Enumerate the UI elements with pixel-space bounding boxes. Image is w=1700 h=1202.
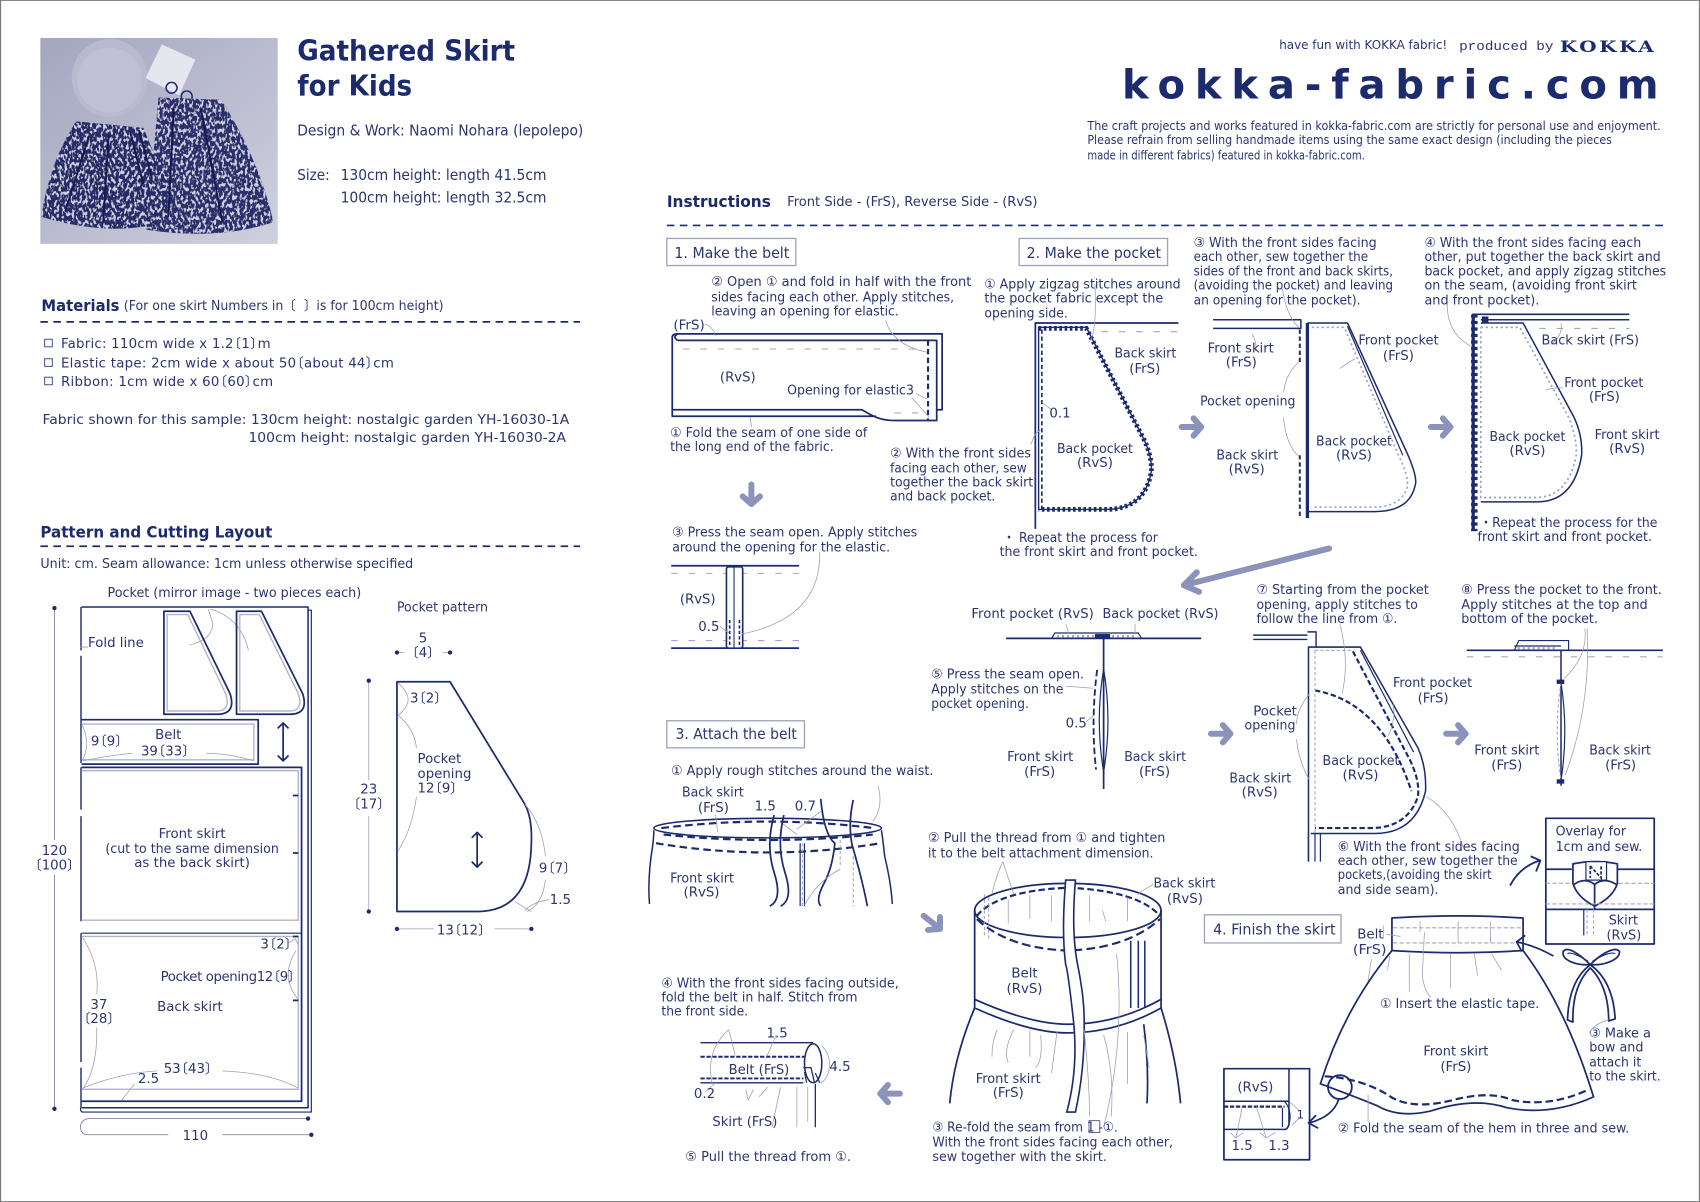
cutting layout diagram: Back skirt: [157, 1000, 223, 1015]
site header: made in different fabrics) featured in kokka-fabric.com.: [1087, 148, 1365, 162]
cutting layout diagram: 〔100〕: [28, 858, 81, 873]
pocket pattern diagram: 5: [419, 632, 427, 647]
cutting layout diagram: 9〔9〕: [91, 735, 129, 750]
pocket pattern diagram: 〔17〕: [347, 798, 391, 813]
designer and size text: Design & Work: Naomi Nohara (lepolepo): [297, 121, 583, 139]
section 3 steps 2-3: belt attached: (RvS): [1006, 982, 1043, 997]
section 4: finish the skirt: bow and: [1589, 1040, 1643, 1055]
section 3 steps 4-5: folded belt: Skirt (FrS): [712, 1115, 777, 1130]
section 2 step 3: (FrS): [1383, 349, 1414, 364]
section 2 step 4: (RvS): [1609, 442, 1645, 457]
section 2 step 1-2: zigzag pocket: together the back skirt: [890, 476, 1033, 491]
pattern heading: Unit: cm. Seam allowance: 1cm unless otherwise specified: [40, 557, 413, 572]
inset: overlay detail: (RvS): [1607, 929, 1641, 944]
section 2 step 4: (FrS): [1589, 390, 1620, 405]
section 3 steps 2-3: belt attached: sew together with the skirt.: [932, 1150, 1107, 1165]
section 2 step 8: (FrS): [1491, 759, 1522, 774]
section 3 steps 2-3: belt attached: Front skirt: [976, 1072, 1041, 1087]
designer and size text: 130cm height: length 41.5cm: [341, 166, 547, 184]
section 1: make the belt: (FrS): [673, 318, 705, 333]
section 2 step 8: Front skirt: [1474, 743, 1539, 758]
photo of skirts, beret and glasses: [40, 38, 278, 244]
section 3 steps 4-5: folded belt: 1.5: [767, 1026, 788, 1041]
cutting layout diagram: 〔28〕: [77, 1012, 121, 1027]
section 2 step 3: sides of the front and back skirts,: [1194, 264, 1393, 279]
materials section: Ribbon: 1cm wide x 60〔60〕cm: [61, 375, 273, 390]
section 2 step 4: Back pocket: [1489, 430, 1565, 445]
section 3 step 1: rough stitches: [649, 721, 940, 930]
title: for Kids: [297, 69, 412, 102]
section 3 steps 4-5: folded belt: [661, 976, 899, 1165]
instructions heading: [667, 192, 1666, 225]
section 3 step 1: rough stitches: 1.5: [755, 800, 776, 815]
section 2 step 8: ⑧ Press the pocket to the front.: [1461, 583, 1662, 598]
pocket pattern diagram: 12〔9〕: [418, 781, 464, 796]
section 2 steps 6-7: pockets,(avoiding the skirt: [1338, 868, 1492, 883]
section 2 step 3: [1194, 236, 1450, 518]
cutting layout diagram: 110: [183, 1129, 208, 1144]
inset: overlay detail: Overlay for: [1556, 825, 1627, 840]
section 3 steps 4-5: folded belt: Belt (FrS): [729, 1063, 789, 1078]
section 2 steps 6-7: opening, apply stitches to: [1256, 598, 1418, 613]
section 3 steps 2-3: belt attached: ③ Re-fold the seam from 1 -①.: [932, 1121, 1118, 1136]
section 4: finish the skirt: [1204, 915, 1661, 1137]
site header: KOKKA: [1560, 37, 1656, 56]
section 4: finish the skirt: (FrS): [1353, 943, 1387, 958]
site header: [1086, 37, 1661, 162]
section 2 steps 6-7: Pocket: [1253, 704, 1297, 719]
section 2 step 1-2: zigzag pocket: ・ Repeat the process for: [1003, 531, 1158, 546]
section 3 steps 4-5: folded belt: 4.5: [829, 1060, 851, 1075]
pocket pattern diagram: Pocket: [418, 752, 461, 767]
cutting layout diagram: Belt: [155, 728, 181, 743]
section 2 step 4: [1424, 236, 1666, 545]
section 2 step 8: bottom of the pocket.: [1461, 612, 1598, 627]
designer and size text: 100cm height: length 32.5cm: [341, 189, 547, 207]
section 2 step 3: Front skirt: [1208, 341, 1274, 356]
section 2 step 4: front skirt and front pocket.: [1478, 530, 1652, 545]
section 2 steps 6-7: (RvS): [1342, 768, 1379, 783]
title: [297, 35, 515, 102]
site header: have fun with KOKKA fabric!: [1279, 37, 1447, 52]
section 2 step 5: Front skirt: [1007, 750, 1073, 765]
section 2 step 5: 0.5: [1066, 716, 1087, 731]
section 1: make the belt: sides facing each other. Apply stitches,: [711, 290, 954, 305]
pocket pattern diagram: [347, 600, 577, 938]
cutting layout diagram: 39〔33〕: [141, 744, 196, 759]
cutting layout diagram: 120: [42, 844, 67, 859]
section 3 step 1: rough stitches: 3. Attach the belt: [675, 726, 797, 743]
section 2 step 8: Back skirt: [1589, 743, 1651, 758]
section 2 step 3: (RvS): [1336, 449, 1372, 464]
section 2 step 4: on the seam, (avoiding front skirt: [1424, 278, 1637, 293]
section 2 steps 6-7: each other, sew together the: [1338, 854, 1518, 869]
inset: hem fold detail: 1.3: [1268, 1139, 1290, 1154]
section 2 step 8: (FrS): [1605, 759, 1636, 774]
section 3 step 1: rough stitches: (FrS): [698, 801, 729, 816]
inset: hem fold detail: 1.5: [1232, 1139, 1253, 1154]
section 3 steps 2-3: belt attached: ② Pull the thread from ① and tighten: [928, 831, 1165, 846]
cutting layout diagram: 37: [90, 998, 107, 1013]
section 2 step 1-2: zigzag pocket: 0.1: [1049, 406, 1071, 421]
section 4: finish the skirt: Front skirt: [1423, 1045, 1488, 1060]
section 4: finish the skirt: (FrS): [1440, 1060, 1471, 1075]
site header: Please refrain from selling handmade items using the same exact design (including the pieces: [1087, 133, 1612, 147]
section 2 step 5: Back skirt: [1124, 750, 1186, 765]
section 2 step 3: Back skirt: [1216, 449, 1278, 464]
section 2 step 5: [931, 607, 1230, 789]
section 2 step 1-2: zigzag pocket: [890, 238, 1201, 560]
section 1: make the belt: leaving an opening for elastic.: [711, 304, 899, 319]
designer and size text: Size:: [297, 166, 330, 184]
section 2 steps 6-7: (RvS): [1242, 786, 1278, 801]
cutting layout diagram: as the back skirt): [134, 856, 250, 871]
section 2 step 1-2: zigzag pocket: (FrS): [1129, 362, 1160, 377]
section 2 step 8: Apply stitches at the top and: [1461, 598, 1648, 613]
section 3 step 1: rough stitches: ① Apply rough stitches around the waist.: [671, 764, 933, 779]
section 2 step 4: and front pocket).: [1424, 294, 1539, 309]
section 2 steps 6-7: opening: [1245, 718, 1295, 733]
cutting layout diagram: (cut to the same dimension: [105, 842, 279, 857]
section 2 step 4: ④ With the front sides facing each: [1424, 236, 1641, 251]
cutting layout diagram: 3〔2〕: [260, 937, 298, 952]
cutting layout diagram: 2.5: [138, 1072, 159, 1087]
instructions heading: Front Side - (FrS), Reverse Side - (RvS): [787, 195, 1038, 210]
inset: hem fold detail: [1224, 1069, 1310, 1160]
site header: The craft projects and works featured in kokka-fabric.com are strictly for personal use and enjoyment.: [1086, 119, 1661, 133]
section 2 step 4: Front pocket: [1564, 376, 1643, 391]
inset: overlay detail: 1cm and sew.: [1556, 840, 1642, 855]
cutting layout diagram: Fold line: [88, 636, 144, 651]
instructions heading: Instructions: [667, 192, 771, 211]
section 3 steps 2-3: belt attached: With the front sides facing each other,: [932, 1136, 1173, 1151]
materials section: (For one skirt Numbers in〔 〕is for 100cm height): [124, 299, 444, 314]
pattern heading: [40, 523, 580, 572]
section 3 steps 2-3: belt attached: it to the belt attachment dimension.: [928, 846, 1153, 861]
section 1: make the belt: the long end of the fabric.: [670, 440, 834, 455]
section 2 steps 6-7: (FrS): [1418, 691, 1449, 706]
pattern heading: Pattern and Cutting Layout: [40, 523, 273, 542]
section 2 step 1-2: zigzag pocket: and back pocket.: [890, 490, 995, 505]
materials section: Elastic tape: 2cm wide x about 50〔about 44〕cm: [61, 356, 394, 371]
section 2 step 1-2: zigzag pocket: facing each other, sew: [890, 462, 1027, 477]
section 2 steps 6-7: and side seam).: [1338, 883, 1439, 898]
section 2 step 3: (FrS): [1226, 355, 1257, 370]
section 3 steps 4-5: folded belt: 0.2: [694, 1087, 715, 1102]
section 4: finish the skirt: attach it: [1589, 1056, 1641, 1071]
materials section: 100cm height: nostalgic garden YH-16030-2A: [248, 431, 566, 446]
section 3 steps 2-3: belt attached: Belt: [1011, 967, 1038, 982]
section 2 step 3: each other, sew together the: [1194, 250, 1368, 265]
section 3 steps 2-3: belt attached: Back skirt: [1153, 877, 1215, 892]
section 2 step 1-2: zigzag pocket: Back skirt: [1114, 347, 1176, 362]
pocket pattern diagram: 23: [360, 782, 377, 797]
materials section: Fabric shown for this sample: 130cm height: nostalgic garden YH-16030-1A: [43, 413, 569, 428]
section 4: finish the skirt: to the skirt.: [1589, 1070, 1661, 1085]
cutting layout diagram: Pocket opening12〔9〕: [161, 970, 301, 985]
section 3 step 1: rough stitches: Back skirt: [682, 786, 744, 801]
pocket pattern diagram: 13〔12〕: [437, 923, 491, 938]
materials section: Materials: [41, 296, 119, 315]
cutting layout diagram: [28, 586, 361, 1144]
section 2 step 1-2: zigzag pocket: (RvS): [1077, 456, 1113, 471]
section 3 steps 4-5: folded belt: ⑤ Pull the thread from ①.: [685, 1150, 851, 1165]
section 2 step 3: ③ With the front sides facing: [1194, 236, 1377, 251]
section 1: make the belt: (RvS): [680, 593, 716, 608]
pocket pattern diagram: Pocket pattern: [397, 600, 488, 615]
section 1: make the belt: ② Open ① and fold in half with the front: [711, 275, 971, 290]
section 2 steps 6-7: Back skirt: [1229, 772, 1291, 787]
section 2 step 3: an opening for the pocket).: [1194, 294, 1360, 309]
section 4: finish the skirt: ① Insert the elastic tape.: [1380, 997, 1539, 1012]
pocket pattern diagram: 1.5: [550, 893, 571, 908]
section 2 step 3: Pocket opening: [1200, 394, 1295, 409]
section 2 step 1-2: zigzag pocket: the pocket fabric except the: [984, 291, 1163, 306]
section 2 step 1-2: zigzag pocket: ① Apply zigzag stitches around: [984, 277, 1181, 292]
section 3 steps 4-5: folded belt: the front side.: [661, 1005, 748, 1020]
section 1: make the belt: 0.5: [698, 620, 719, 635]
pocket pattern diagram: opening: [418, 767, 471, 782]
section 2 step 1-2: zigzag pocket: Back pocket: [1057, 442, 1133, 457]
cutting layout diagram: 53〔43〕: [164, 1062, 218, 1077]
section 2 step 8: [1461, 583, 1663, 786]
section 4: finish the skirt: 4. Finish the skirt: [1213, 921, 1336, 938]
section 2 step 3: (avoiding the pocket) and leaving: [1194, 278, 1393, 293]
section 3 steps 2-3: belt attached: (FrS): [993, 1086, 1024, 1101]
cutting layout diagram: Pocket (mirror image - two pieces each): [108, 586, 361, 601]
section 2 step 5: ⑤ Press the seam open.: [931, 667, 1084, 682]
section 1: make the belt: [667, 238, 971, 648]
section 2 step 4: (RvS): [1509, 444, 1545, 459]
section 2 step 4: Back skirt (FrS): [1542, 334, 1639, 349]
section 2 step 4: back pocket, and apply zigzag stitches: [1424, 264, 1666, 279]
section 2 step 3: Back pocket: [1316, 434, 1392, 449]
pocket pattern diagram: 〔4〕: [405, 646, 441, 661]
section 1: make the belt: 1. Make the belt: [674, 245, 790, 262]
pocket pattern diagram: 3〔2〕: [410, 691, 448, 706]
section 2 step 1-2: zigzag pocket: the front skirt and front pocket.: [1000, 545, 1198, 560]
section 2 step 4: other, put together the back skirt and: [1424, 250, 1661, 265]
materials section: Fabric: 110cm wide x 1.2〔1〕m: [61, 337, 271, 352]
section 2 step 5: Apply stitches on the: [931, 683, 1064, 698]
title: Gathered Skirt: [297, 35, 515, 68]
section 1: make the belt: around the opening for the elastic.: [672, 541, 890, 556]
section 2 step 5: Back pocket (RvS): [1103, 607, 1219, 622]
designer and size text: [297, 121, 583, 207]
section 2 step 3: Front pocket: [1358, 334, 1439, 349]
section 4: finish the skirt: ③ Make a: [1589, 1026, 1651, 1041]
arrow: large diagonal to step 5: [1184, 548, 1329, 592]
section 2 steps 6-7: Front pocket: [1393, 676, 1472, 691]
section 1: make the belt: (RvS): [720, 371, 756, 386]
section 2 step 5: Front pocket (RvS): [971, 607, 1094, 622]
section 2 step 4: ・Repeat the process for the: [1480, 516, 1657, 531]
section 2 steps 6-7: ⑦ Starting from the pocket: [1256, 583, 1429, 598]
section 3 steps 4-5: folded belt: fold the belt in half. Stitch from: [661, 990, 858, 1005]
cutting layout diagram: Front skirt: [159, 827, 226, 842]
section 2 step 5: (FrS): [1024, 765, 1055, 780]
section 1: make the belt: Opening for elastic3: [787, 384, 914, 399]
section 3 step 1: rough stitches: Front skirt: [670, 871, 734, 886]
section 1: make the belt: ① Fold the seam of one side of: [670, 426, 868, 441]
section 2 step 5: (FrS): [1139, 765, 1170, 780]
section 2 step 3: (RvS): [1229, 463, 1265, 478]
section 2 steps 6-7: follow the line from ①.: [1256, 612, 1397, 627]
section 2 step 1-2: zigzag pocket: opening side.: [984, 307, 1068, 322]
section 3 steps 4-5: folded belt: ④ With the front sides facing outside,: [661, 976, 899, 991]
inset: overlay detail: [1510, 818, 1654, 944]
section 4: finish the skirt: ② Fold the seam of the hem in three and sew.: [1338, 1122, 1629, 1137]
inset: hem fold detail: 1: [1297, 1108, 1304, 1122]
section 2 step 1-2: zigzag pocket: ② With the front sides: [890, 446, 1031, 461]
inset: overlay detail: Skirt: [1609, 914, 1638, 929]
section 3 step 1: rough stitches: 0.7: [795, 800, 816, 815]
section 2 step 1-2: zigzag pocket: 2. Make the pocket: [1027, 245, 1161, 262]
inset: hem fold detail: (RvS): [1237, 1080, 1273, 1095]
site header: produced by: [1459, 39, 1554, 54]
section 2 steps 6-7: Back pocket: [1323, 754, 1400, 769]
section 2 steps 6-7: [1229, 583, 1520, 898]
section 2 steps 6-7: ⑥ With the front sides facing: [1338, 840, 1520, 855]
section 4: finish the skirt: Belt: [1357, 928, 1384, 943]
section 2 step 5: pocket opening.: [931, 697, 1029, 712]
section 3 steps 2-3: belt attached: [880, 831, 1215, 1165]
site header: kokka-fabric.com: [1122, 63, 1659, 109]
pocket pattern diagram: 9〔7〕: [539, 862, 577, 877]
section 2 step 4: Front skirt: [1595, 428, 1660, 443]
section 3 steps 2-3: belt attached: (RvS): [1167, 892, 1203, 907]
section 3 step 1: rough stitches: (RvS): [684, 885, 720, 900]
section 1: make the belt: ③ Press the seam open. Apply stitches: [672, 526, 917, 541]
materials section: [40, 296, 580, 446]
